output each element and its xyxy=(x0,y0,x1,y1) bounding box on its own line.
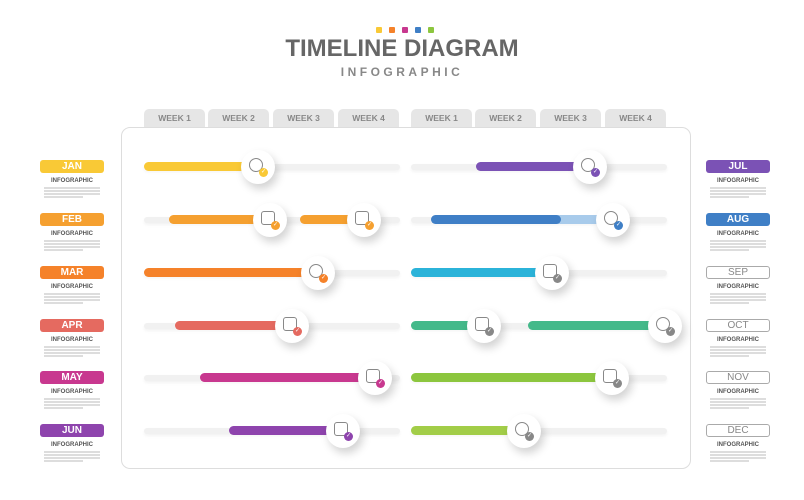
icons: ✓ xyxy=(367,222,372,228)
icons: ✓ xyxy=(295,328,300,334)
icons: ✓ xyxy=(378,380,383,386)
icons: ✓ xyxy=(273,222,278,228)
icons: ✓ xyxy=(346,433,351,439)
right month labels: DEC xyxy=(727,425,749,436)
left month labels: FEB xyxy=(62,214,82,225)
left month labels xyxy=(40,160,104,462)
week tabs: WEEK 2 xyxy=(222,113,255,123)
icons: ✓ xyxy=(487,328,492,334)
right month labels xyxy=(706,160,770,462)
title: TIMELINE DIAGRAM xyxy=(285,35,519,62)
panel: timeline xyxy=(121,127,691,469)
week tabs: WEEK 1 xyxy=(425,113,458,123)
right month labels: INFOGRAPHIC xyxy=(717,178,759,184)
tracks xyxy=(144,164,667,435)
left month labels: INFOGRAPHIC xyxy=(51,337,93,343)
week tabs: WEEK 3 xyxy=(287,113,320,123)
week tabs xyxy=(144,109,666,127)
icons: ✓ xyxy=(615,380,620,386)
right month labels: OCT xyxy=(727,320,749,331)
right month labels: INFOGRAPHIC xyxy=(717,284,759,290)
icons: ✓ xyxy=(593,169,598,175)
icons: ✓ xyxy=(668,328,673,334)
left month labels: APR xyxy=(61,320,83,331)
week tabs: WEEK 2 xyxy=(489,113,522,123)
color dots xyxy=(376,27,434,33)
icons: ✓ xyxy=(321,275,326,281)
icons: ✓ xyxy=(616,222,621,228)
bars xyxy=(144,162,649,435)
right month labels: INFOGRAPHIC xyxy=(717,231,759,237)
icons: ✓ xyxy=(261,169,266,175)
left month labels: INFOGRAPHIC xyxy=(51,231,93,237)
right month labels: NOV xyxy=(727,372,749,383)
week tabs: WEEK 3 xyxy=(554,113,587,123)
subtitle: INFOGRAPHIC xyxy=(341,65,463,79)
left month labels: JUN xyxy=(62,425,82,436)
icons: ✓ xyxy=(555,275,560,281)
week tabs: WEEK 4 xyxy=(352,113,385,123)
left month labels: INFOGRAPHIC xyxy=(51,284,93,290)
left month labels: INFOGRAPHIC xyxy=(51,442,93,448)
right month labels: INFOGRAPHIC xyxy=(717,442,759,448)
week tabs: WEEK 1 xyxy=(158,113,191,123)
icons xyxy=(240,154,688,456)
left month labels: JAN xyxy=(62,161,82,172)
right month labels: INFOGRAPHIC xyxy=(717,337,759,343)
right month labels: INFOGRAPHIC xyxy=(717,389,759,395)
left month labels: MAY xyxy=(61,372,83,383)
icons: ✓ xyxy=(527,433,532,439)
right month labels: JUL xyxy=(729,161,747,172)
left month labels: INFOGRAPHIC xyxy=(51,389,93,395)
right month labels: SEP xyxy=(728,267,748,278)
week tabs: WEEK 4 xyxy=(619,113,652,123)
left month labels: INFOGRAPHIC xyxy=(51,178,93,184)
left month labels: MAR xyxy=(61,267,83,278)
right month labels: AUG xyxy=(727,214,749,225)
